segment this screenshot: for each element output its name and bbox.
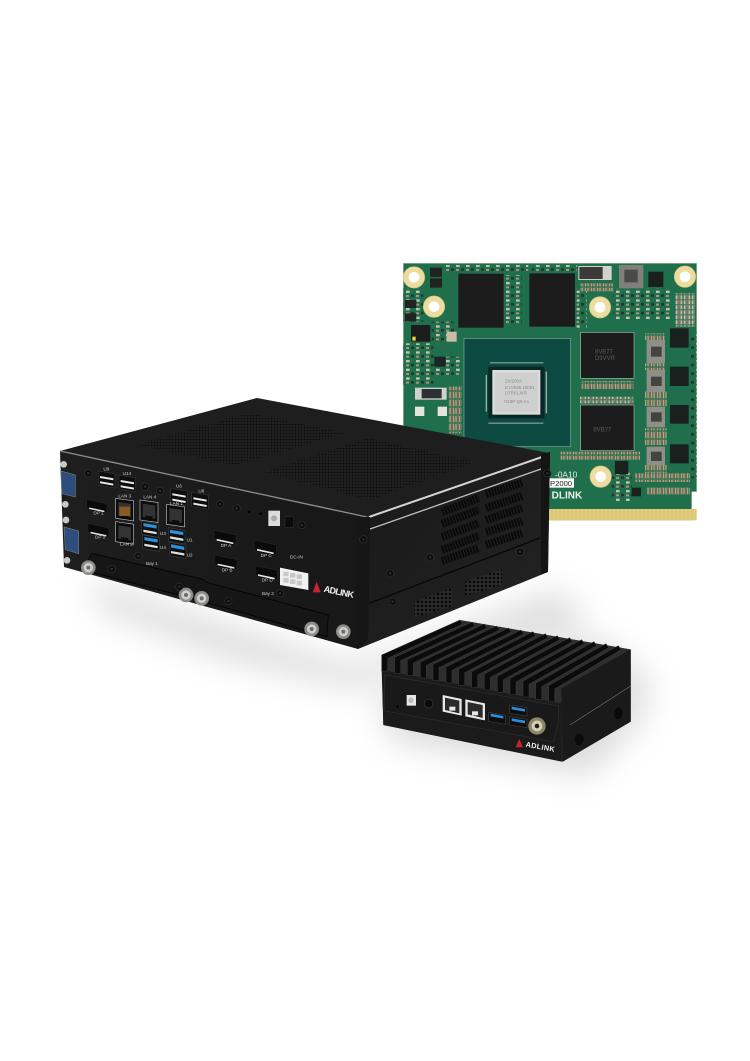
board silkscreen labels: -0A10 bbox=[555, 470, 578, 480]
board silkscreen labels: P2000 bbox=[550, 479, 572, 488]
memory chips: 8VB77 bbox=[593, 428, 612, 434]
side knobs bbox=[575, 707, 623, 745]
side screws bbox=[386, 470, 551, 605]
DC-in connector bbox=[280, 568, 308, 590]
lower side vents right bbox=[465, 569, 502, 596]
port labels: LAN 1 bbox=[170, 501, 183, 506]
port labels: U4 bbox=[160, 545, 166, 550]
thumb screws bbox=[81, 560, 351, 639]
power inductors and regulators bbox=[647, 328, 689, 465]
expansion bay panels bbox=[83, 553, 328, 637]
board silkscreen labels bbox=[549, 470, 583, 501]
port labels: LAN 2 bbox=[120, 542, 133, 547]
board silkscreen labels: DLINK bbox=[552, 490, 583, 501]
GPU package: E LV666 15051 bbox=[505, 385, 535, 390]
top and left parts bbox=[405, 265, 663, 496]
GPU package: N18P-Q5-A1 bbox=[504, 399, 530, 404]
antenna connector bbox=[528, 717, 546, 735]
ADLINK logo: ADLINK bbox=[525, 740, 556, 754]
chassis bbox=[382, 620, 631, 762]
port labels: U14 bbox=[123, 471, 132, 476]
LAN ports bbox=[443, 695, 485, 720]
board substrate bbox=[403, 263, 697, 520]
panel: small fanless computer bbox=[382, 620, 631, 762]
front panel bbox=[60, 451, 370, 649]
ADLINK logo bbox=[313, 582, 355, 600]
memory chips: 8VB77 bbox=[595, 349, 614, 355]
port labels: DP C bbox=[261, 553, 272, 558]
port labels: LAN 4 bbox=[143, 494, 157, 499]
audio jack bbox=[424, 699, 433, 708]
port labels: Bay 1 bbox=[146, 561, 158, 566]
front plate bbox=[384, 675, 558, 742]
panel screws bbox=[85, 470, 367, 605]
DisplayPort ports bbox=[87, 500, 277, 582]
GPU package: ZIV200A bbox=[505, 378, 522, 383]
top cover bbox=[60, 398, 549, 517]
front panel connectors bbox=[60, 461, 367, 639]
LAN ports bbox=[116, 498, 185, 544]
lower side vents bbox=[414, 588, 452, 617]
port labels: LAN 3 bbox=[118, 494, 132, 499]
USB ports bbox=[98, 471, 208, 559]
port labels: U6 bbox=[176, 484, 182, 489]
mounting holes bbox=[403, 266, 696, 487]
port labels: DP A bbox=[221, 543, 232, 548]
ground shadows bbox=[90, 580, 650, 775]
port labels: Bay 2 bbox=[262, 591, 274, 596]
right side panel bbox=[357, 452, 551, 649]
port labels: U1 bbox=[187, 538, 193, 543]
panel: large embedded computer bbox=[60, 398, 551, 649]
power button and switch bbox=[248, 511, 294, 527]
port labels: U9 bbox=[103, 466, 110, 471]
GPU package: DTR01JKR bbox=[505, 390, 527, 395]
port labels: DC-IN bbox=[290, 554, 303, 559]
memory chips: D9VVR bbox=[595, 356, 616, 362]
port labels: U2 bbox=[187, 552, 193, 557]
ADLINK logo: ADLINK bbox=[323, 584, 355, 600]
port labels: DP 1 bbox=[93, 510, 104, 515]
port labels: U8 bbox=[198, 488, 205, 493]
power button bbox=[396, 695, 416, 708]
GPU package bbox=[464, 338, 571, 447]
USB ports bbox=[489, 705, 527, 728]
port labels: DP B bbox=[222, 568, 232, 573]
port labels bbox=[93, 466, 303, 596]
panel: MXM GPU circuit board bbox=[403, 263, 697, 520]
port labels: DP 0 bbox=[95, 534, 106, 539]
port labels: U3 bbox=[160, 531, 166, 536]
port labels: DP D bbox=[262, 578, 273, 583]
heatsink fins bbox=[382, 620, 631, 762]
memory chips bbox=[458, 273, 634, 451]
gold edge connector bbox=[548, 509, 697, 520]
side seam bbox=[570, 686, 631, 725]
side ventilation grilles bbox=[442, 483, 522, 561]
component clusters bbox=[403, 265, 697, 502]
serial ports bbox=[60, 461, 79, 564]
